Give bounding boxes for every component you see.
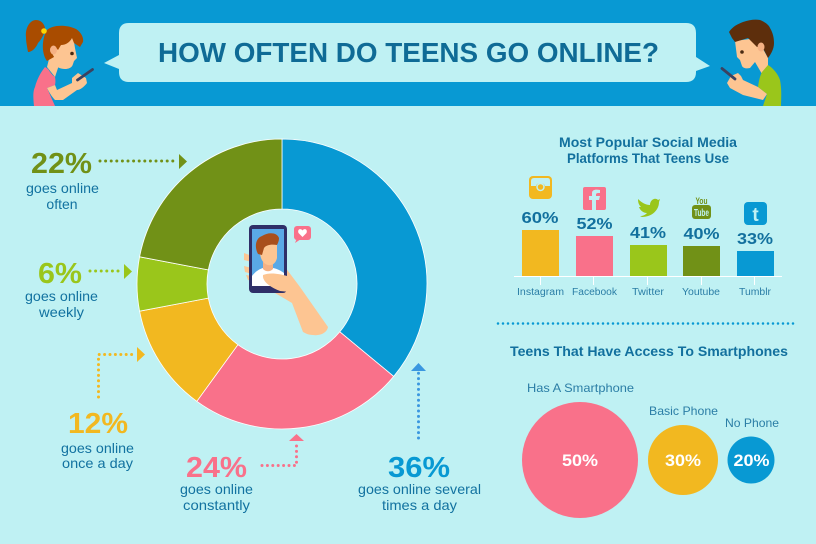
panel: smartphone access: [510, 343, 788, 518]
callout: 6% weekly: weekly: [38, 304, 84, 320]
heading: smartphone access: Teens That Have Access To Smartphones: [510, 343, 788, 359]
slice: several times a day 36%: [282, 139, 427, 376]
bar: Facebook 52%: Facebook: [572, 287, 618, 298]
bar: Twitter 41%: [630, 199, 667, 298]
bar: Twitter 41%: 41%: [630, 225, 666, 242]
callout: 36% several times a day: 36%: [388, 452, 450, 484]
callout: 22% often: [26, 148, 187, 212]
bar: Youtube 40%: You: [696, 196, 708, 206]
bubble: basic phone 30%: Basic Phone: [649, 404, 718, 418]
panel: social media platforms: [514, 134, 782, 298]
heading: social media: [559, 134, 737, 166]
callout: 6% weekly: [25, 258, 132, 320]
callout: 22% often: 22%: [31, 148, 92, 180]
callout: 12% once a day: goes online: [61, 440, 134, 456]
bubble: has a smartphone 50%: Has A Smartphone: [527, 381, 634, 395]
callout: 6% weekly: goes online: [25, 288, 98, 304]
callout: 24% constantly: constantly: [183, 497, 250, 513]
bar: Tumblr 33%: 33%: [737, 231, 773, 248]
callout: 12% once a day: 12%: [68, 408, 128, 440]
bar: Instagram 60%: 60%: [522, 210, 558, 227]
donut chart: [137, 139, 427, 429]
callout: 22% often: often: [46, 196, 78, 212]
header band: [0, 0, 816, 106]
bubble: no phone 20%: [725, 416, 779, 484]
callout: 24% constantly: [180, 434, 304, 513]
bar: Instagram 60%: [517, 176, 564, 298]
heading: social media: Platforms That Teens Use: [567, 150, 729, 166]
bar: Facebook 52%: 52%: [576, 216, 612, 233]
bar: Tumblr 33%: t: [752, 205, 759, 226]
bubble: no phone 20%: No Phone: [725, 416, 779, 430]
heading: social media: Most Popular Social Media: [559, 134, 737, 150]
callout: 36% several times a day: goes online several: [358, 481, 481, 497]
bar: Youtube 40%: Tube: [694, 208, 709, 219]
slice: once a day 12%: [140, 298, 238, 401]
bar: Youtube 40%: [682, 196, 720, 298]
bar: Tumblr 33%: [737, 202, 774, 298]
callout: 12% once a day: once a day: [62, 455, 133, 471]
illustration: girl with phone: [26, 20, 92, 106]
bar: Tumblr 33%: Tumblr: [739, 287, 772, 298]
icon: hand holding phone with selfie: [244, 225, 328, 335]
callout: 12% once a day: [61, 347, 145, 471]
bar: Instagram 60%: Instagram: [517, 287, 564, 298]
slice: often 22%: [140, 139, 282, 270]
bar: Facebook 52%: [572, 187, 618, 298]
bubble: basic phone 30%: [648, 404, 718, 495]
title: HOW OFTEN DO TEENS GO ONLINE?: [158, 37, 659, 68]
bar: Youtube 40%: Youtube: [682, 287, 720, 298]
bar: Twitter 41%: Twitter: [632, 287, 665, 298]
title banner: [104, 23, 710, 82]
callout: 36% several times a day: times a day: [382, 497, 457, 513]
bubble: no phone 20%: 20%: [734, 451, 770, 470]
bar: Youtube 40%: 40%: [684, 226, 720, 243]
bubble: basic phone 30%: 30%: [665, 451, 701, 470]
bubble: has a smartphone 50%: 50%: [562, 451, 598, 470]
callout: 36% several times a day: [358, 363, 481, 513]
slice: constantly 24%: [197, 332, 394, 429]
slice: weekly 6%: [137, 257, 208, 311]
callout: 22% often: goes online: [26, 180, 99, 196]
callout: 24% constantly: goes online: [180, 481, 253, 497]
callout: 6% weekly: 6%: [38, 258, 82, 290]
callout: 24% constantly: 24%: [186, 452, 247, 484]
bubble: has a smartphone 50%: [522, 381, 638, 518]
illustration: boy with phone: [722, 20, 781, 106]
